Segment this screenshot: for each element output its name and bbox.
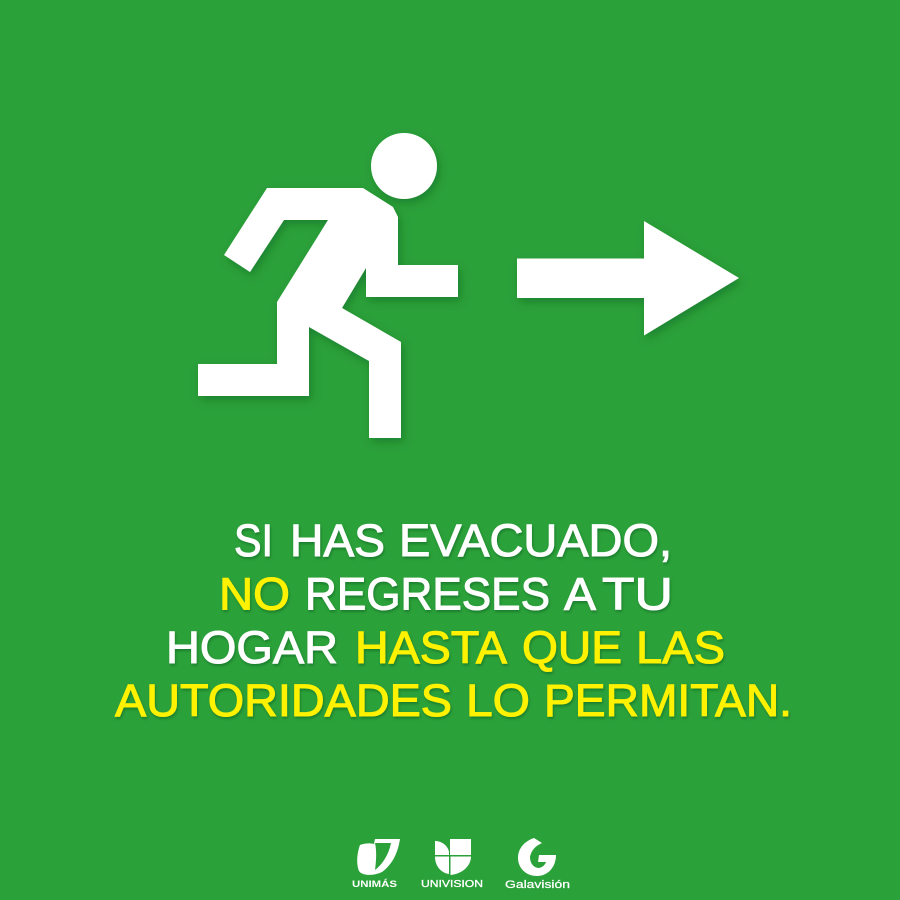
line 2: TU <box>602 568 673 620</box>
line 2 <box>219 568 673 620</box>
Galavisión mark <box>518 838 556 876</box>
line 3: HOGAR <box>166 622 338 673</box>
line 4: AUTORIDADES <box>115 675 452 726</box>
line 2: REGRESES <box>305 568 550 620</box>
line 2: NO <box>219 568 290 620</box>
line 4: LO <box>466 675 530 726</box>
line 1: EVACUADO, <box>399 515 672 566</box>
Univision mark <box>435 839 471 875</box>
icon: running person <box>198 133 458 438</box>
line 3: HASTA <box>355 622 507 673</box>
Univision wordmark: UNIVISION <box>421 879 483 890</box>
person body <box>198 188 458 438</box>
UniMás wordmark: UNIMÁS <box>352 879 397 890</box>
line 4: PERMITAN. <box>544 675 792 726</box>
logos row <box>352 838 570 891</box>
line 1 <box>234 515 672 566</box>
Galavisión wordmark: Galavisión <box>505 879 570 891</box>
main message <box>115 515 792 726</box>
person head <box>371 133 437 199</box>
line 3: QUE <box>522 622 622 673</box>
line 2: A <box>564 568 596 620</box>
line 3: LAS <box>636 622 725 673</box>
logo: UniMás <box>352 839 400 890</box>
logo: Galavisión <box>505 838 570 891</box>
logo: Univision <box>421 839 483 890</box>
arrow pointing right <box>517 221 739 336</box>
line 3 <box>166 622 725 673</box>
line 1: HAS <box>290 515 385 566</box>
line 4 <box>115 675 792 726</box>
line 1: SI <box>234 515 273 566</box>
UniMás mark <box>357 839 400 875</box>
